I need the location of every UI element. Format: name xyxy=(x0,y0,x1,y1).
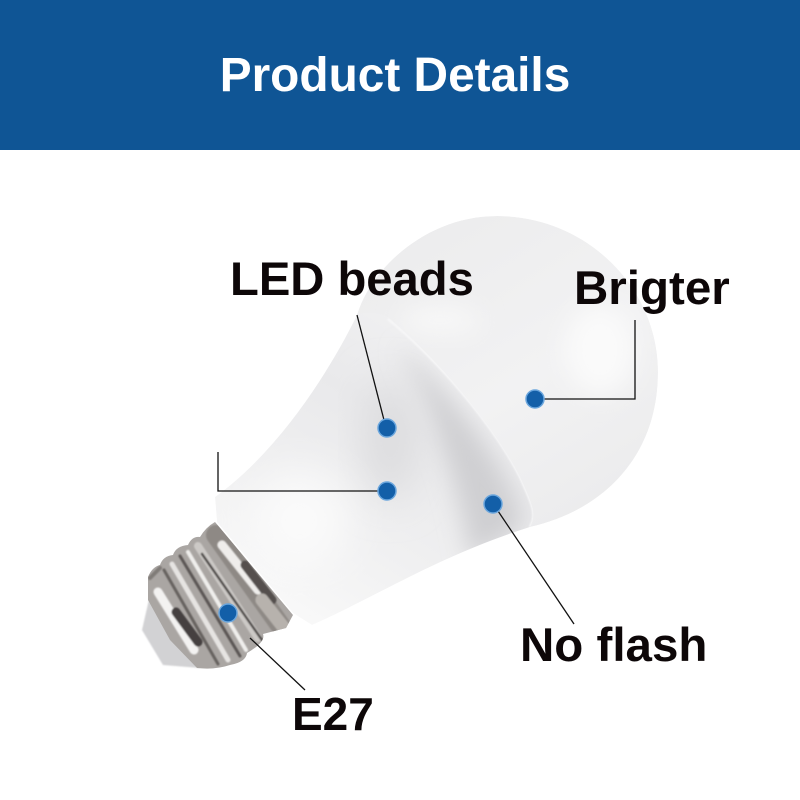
callout lines xyxy=(218,315,635,690)
label: LED beads: LED beads xyxy=(230,253,474,306)
screw base xyxy=(148,522,293,669)
bulb neck and body xyxy=(215,313,533,625)
label: No flash: No flash xyxy=(520,619,707,672)
label: Brigter: Brigter xyxy=(574,262,730,315)
end ridge highlight and shadow xyxy=(158,592,194,650)
collar band xyxy=(216,535,280,625)
glass dome xyxy=(357,216,658,527)
marker: No flash xyxy=(484,495,502,513)
marker: Brigter xyxy=(526,390,544,408)
bulb cap tip xyxy=(142,595,200,668)
seam rim xyxy=(411,338,534,526)
header banner xyxy=(0,0,800,150)
title: Product Details xyxy=(220,49,570,102)
seam shading xyxy=(410,363,526,551)
marker: left callout xyxy=(378,482,396,500)
thread ridges xyxy=(198,546,258,638)
marker: LED beads xyxy=(378,419,396,437)
label: E27: E27 xyxy=(292,688,374,740)
light bulb xyxy=(130,216,658,680)
marker: E27 xyxy=(219,604,237,622)
